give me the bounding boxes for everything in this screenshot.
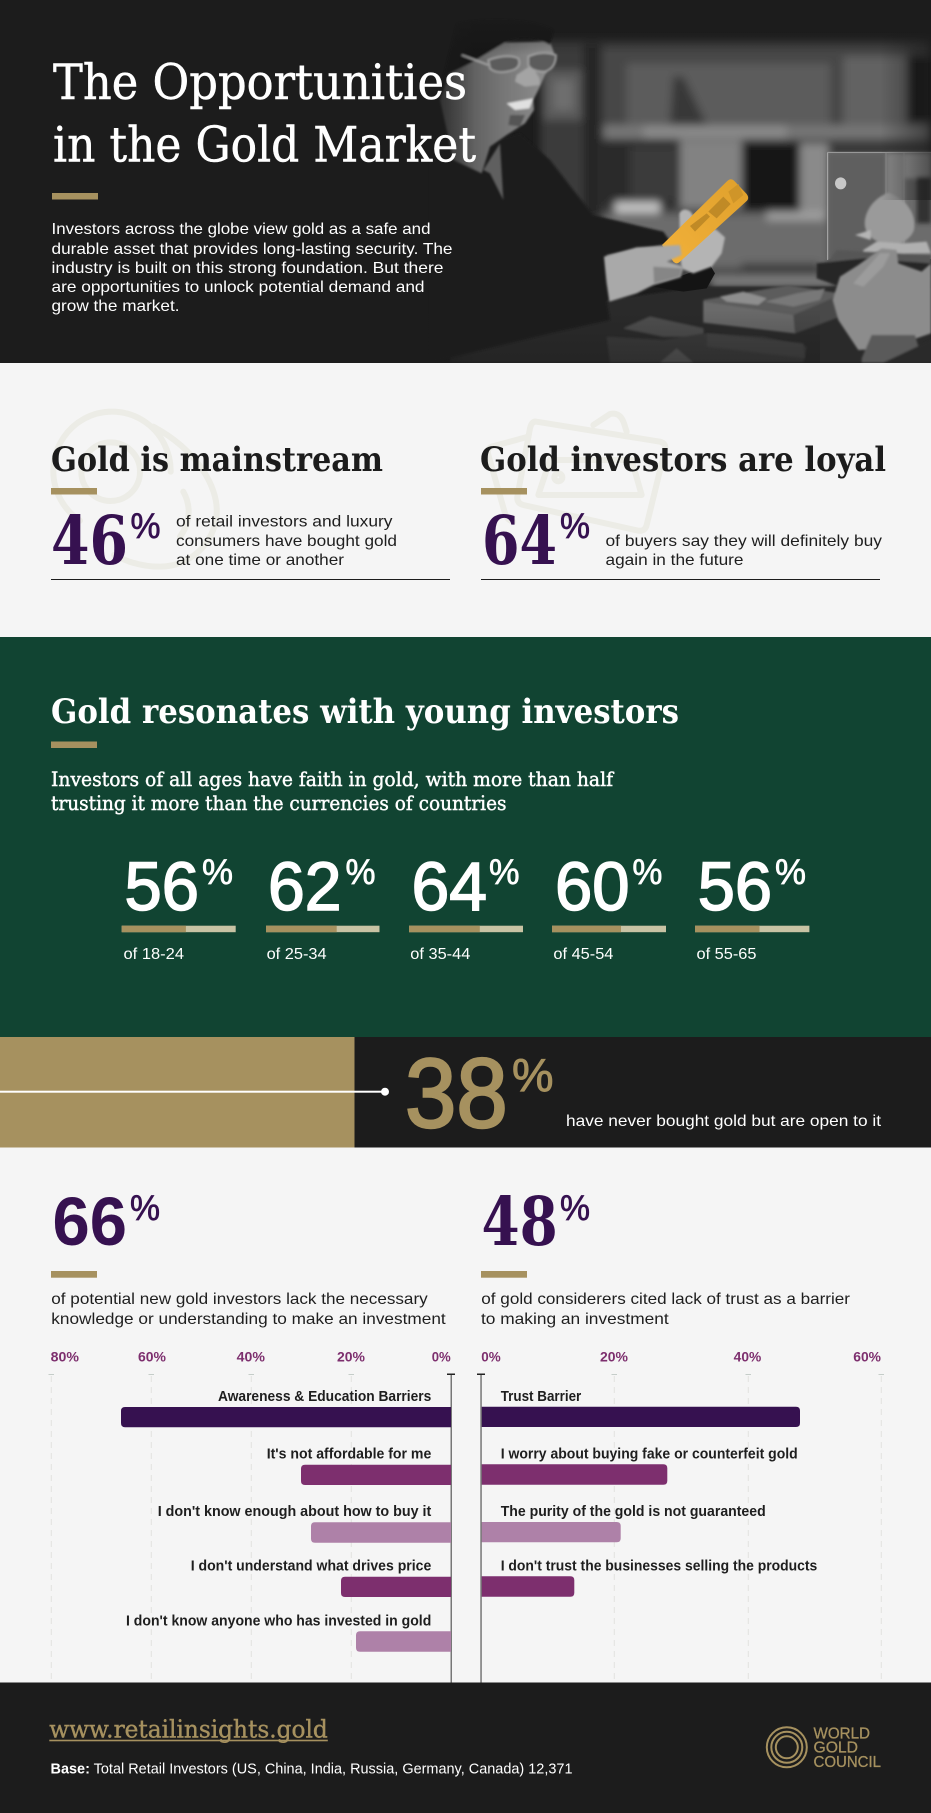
- foreground hands: [833, 248, 931, 363]
- horizontal bar chart: I don't know anyone who has invested in gold: [126, 1613, 431, 1629]
- accent bar: [481, 488, 527, 494]
- stat: 25-34: %: [346, 853, 376, 892]
- wooden box: [703, 285, 840, 358]
- right column: trust: [477, 1182, 881, 1682]
- man: front hand: [604, 245, 683, 302]
- horizontal bar chart: Awareness & Education Barriers: [218, 1389, 431, 1405]
- accent bar: [51, 488, 97, 494]
- stat: 55-65: 56: [698, 848, 772, 925]
- stat: 35-44: [409, 848, 523, 963]
- stat: 18-24: 56: [124, 848, 199, 925]
- horizontal bar chart: I don't understand what drives price: [191, 1558, 431, 1574]
- stat: 55-65: %: [775, 853, 806, 892]
- website link: www.retailinsights.gold: [49, 1716, 328, 1744]
- description: at one time or another: [176, 552, 345, 569]
- stat 66%: %: [130, 1189, 160, 1228]
- stat 66%: 66: [52, 1183, 127, 1260]
- axis labels: [481, 1350, 881, 1364]
- intro text: are opportunities to unlock potential demand and: [52, 279, 424, 296]
- description: to making an investment: [481, 1311, 669, 1328]
- horizontal bar chart: It's not affordable for me: [267, 1446, 431, 1462]
- stat: 55-65: [695, 848, 809, 963]
- description: [51, 1291, 446, 1328]
- subheading: [51, 767, 614, 815]
- description: [481, 1291, 851, 1328]
- heading: Gold resonates with young investors: [51, 692, 679, 732]
- accent bar: [51, 742, 97, 748]
- hero photo: man holding gold bar: [400, 0, 931, 363]
- stat: 18-24: [122, 848, 236, 963]
- man: cuff: [653, 265, 715, 292]
- stat 46%: 46: [51, 501, 128, 580]
- description: consumers have bought gold: [176, 533, 397, 550]
- axis labels: [51, 1350, 451, 1364]
- panel: hero: [0, 0, 931, 363]
- logo: World Gold Council: [767, 1725, 881, 1771]
- stat 48%: %: [560, 1189, 590, 1228]
- gold bar: [662, 179, 748, 263]
- base note: Base: Total Retail Investors (US, China, India, Russia, Germany, Canada) 12,371: [50, 1761, 572, 1777]
- title: The Opportunities: [53, 54, 467, 111]
- intro text: [52, 221, 453, 315]
- horizontal bar chart: I worry about buying fake or counterfeit gold: [501, 1446, 798, 1462]
- title accent bar: [52, 193, 98, 200]
- subheading: trusting it more than the currencies of countries: [51, 791, 506, 815]
- man: back hand: [679, 210, 725, 273]
- horizontal bar chart: [121, 1374, 455, 1682]
- gridlines: [51, 1376, 881, 1682]
- axis labels: 60%: [853, 1350, 881, 1364]
- stat: 35-44: 64: [412, 848, 487, 925]
- panel: 38% band: [0, 1037, 931, 1148]
- intro text: durable asset that provides long-lasting security. The: [52, 241, 453, 258]
- horizontal bar chart: I don't know enough about how to buy it: [158, 1504, 431, 1520]
- left column: awareness and education: [51, 1183, 455, 1682]
- stat: 45-54: 60: [555, 848, 630, 925]
- stat: 25-34: [266, 848, 380, 963]
- description: [176, 514, 397, 569]
- stat: 25-34: of 25-34: [267, 946, 327, 963]
- stat 48%: 48: [482, 1182, 558, 1261]
- icon: gold coil watermark: [53, 412, 217, 567]
- horizontal bar chart: Trust Barrier: [501, 1389, 582, 1405]
- description: of potential new gold investors lack the necessary: [51, 1291, 428, 1308]
- block: gold investors are loyal: [480, 440, 886, 580]
- stat: 18-24: %: [202, 853, 233, 892]
- panel: barriers: [0, 1148, 931, 1682]
- stat: 35-44: of 35-44: [410, 946, 471, 963]
- stat: 35-44: %: [489, 853, 520, 892]
- subheading: Investors of all ages have faith in gold, with more than half: [51, 767, 614, 791]
- heading: Gold investors are loyal: [480, 440, 886, 480]
- axis labels: 20%: [600, 1350, 628, 1364]
- axis labels: 20%: [337, 1350, 365, 1364]
- stat: 18-24: of 18-24: [124, 946, 184, 963]
- accent bar: [481, 1271, 527, 1278]
- stat: 45-54: [552, 848, 666, 963]
- heading: Gold is mainstream: [51, 440, 383, 480]
- stat 38%: 38: [405, 1038, 508, 1148]
- stat 64%: %: [560, 507, 590, 546]
- axis labels: 40%: [734, 1350, 761, 1364]
- stat 38%: %: [512, 1049, 554, 1101]
- axis labels: 0%: [481, 1350, 501, 1364]
- accent bar: [51, 1271, 97, 1278]
- stat 64%: 64: [482, 501, 557, 580]
- horizontal bar chart: The purity of the gold is not guaranteed: [501, 1504, 766, 1520]
- description: again in the future: [606, 552, 744, 569]
- intro text: Investors across the globe view gold as a safe and: [52, 221, 430, 238]
- stat 46%: %: [130, 507, 160, 546]
- description: [606, 533, 882, 569]
- description: of gold considerers cited lack of trust as a barrier: [481, 1291, 851, 1308]
- block: gold is mainstream: [51, 440, 450, 580]
- panel: gold resonates with young investors: [0, 637, 931, 1037]
- panel: gold is mainstream and loyal: [0, 363, 931, 637]
- description: of retail investors and luxury: [176, 514, 392, 530]
- axis labels: 40%: [237, 1350, 265, 1364]
- stat: 55-65: of 55-65: [696, 946, 756, 963]
- gold progress block: [0, 1037, 354, 1148]
- glass case with ornament: [817, 152, 931, 287]
- stat: 25-34: 62: [268, 848, 342, 925]
- table and reflections: [450, 287, 931, 363]
- connector line and dot: [0, 1088, 389, 1096]
- description: of buyers say they will definitely buy: [606, 533, 882, 550]
- stat: 45-54: %: [632, 853, 662, 892]
- blurred shop background: [540, 40, 931, 288]
- panel: footer: [0, 1682, 931, 1813]
- title: in the Gold Market: [53, 116, 476, 174]
- horizontal bar chart: I don't trust the businesses selling the products: [501, 1558, 817, 1574]
- logo: World Gold Council: GOLD: [814, 1740, 858, 1757]
- axis labels: 60%: [138, 1350, 166, 1364]
- intro text: grow the market.: [52, 298, 180, 315]
- man: suit: [430, 133, 672, 363]
- horizontal bar chart: [477, 1374, 817, 1682]
- logo: World Gold Council: WORLD: [814, 1725, 870, 1742]
- description: knowledge or understanding to make an investment: [51, 1311, 446, 1328]
- stat: 45-54: of 45-54: [553, 946, 614, 963]
- stat description: have never bought gold but are open to it: [566, 1113, 882, 1130]
- axis labels: 0%: [432, 1350, 451, 1364]
- title: [53, 54, 476, 174]
- icon: wallet watermark: [488, 414, 665, 531]
- axis labels: 80%: [51, 1350, 79, 1364]
- intro text: industry is built on this strong foundation. But there: [52, 260, 444, 277]
- man: head: [440, 20, 557, 200]
- logo: World Gold Council: COUNCIL: [814, 1754, 881, 1771]
